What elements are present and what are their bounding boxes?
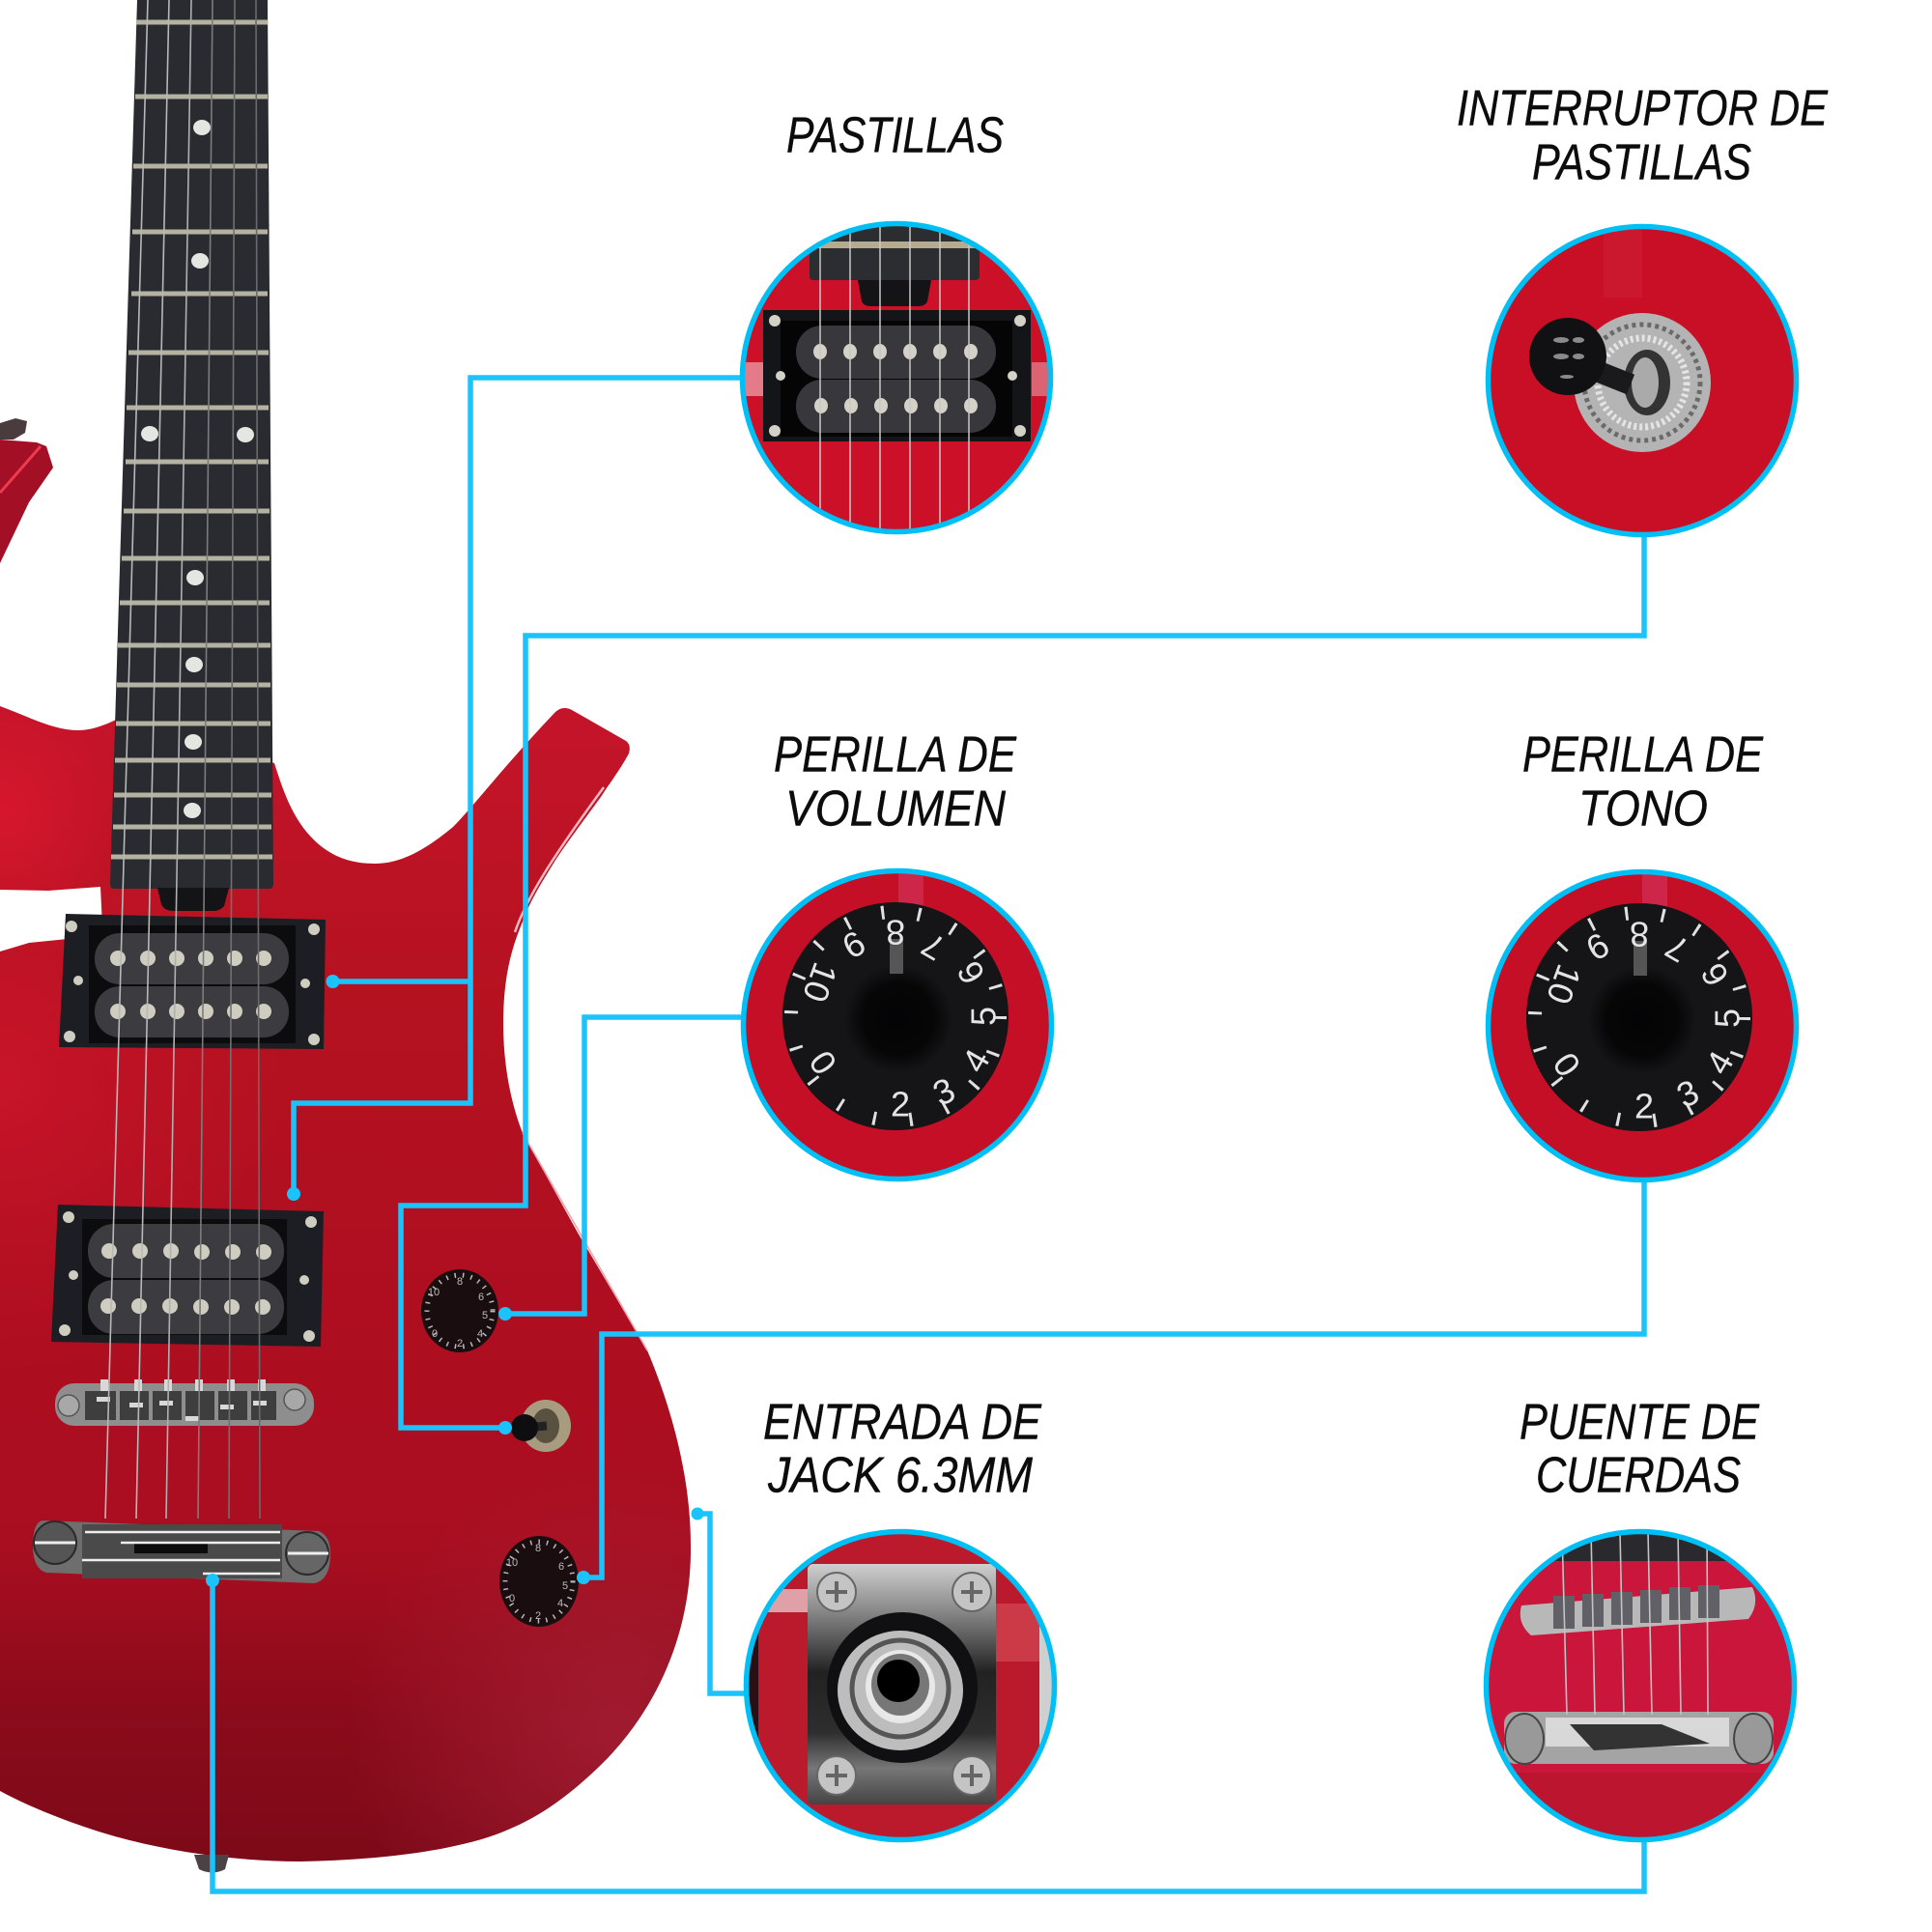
dial: 7	[1659, 926, 1695, 971]
dial: 4	[1697, 1044, 1742, 1081]
dial: 7	[915, 924, 952, 969]
tone knob: 0	[509, 1593, 515, 1605]
heading: interruptor de pastillas	[1457, 81, 1829, 191]
tone knob	[499, 1536, 579, 1627]
heading: entrada de jack 6.3mm: JACK 6.3MM	[767, 1447, 1034, 1503]
heading: entrada de jack 6.3mm: ENTRADA DE	[763, 1395, 1042, 1451]
toggle switch	[511, 1400, 571, 1452]
volume knob: 10	[428, 1287, 440, 1298]
dial: 0	[801, 1043, 845, 1082]
fret inlays	[141, 120, 254, 818]
dial: 5	[1708, 1009, 1747, 1028]
stop tailpiece	[33, 1520, 330, 1583]
callout circle: pastillas	[734, 217, 1063, 546]
tone knob: 10	[506, 1557, 518, 1569]
frets	[111, 22, 272, 857]
heading: perilla de volumen: VOLUMEN	[785, 781, 1006, 837]
guitar	[0, 0, 724, 1874]
dial: 8	[1630, 914, 1649, 954]
volume knob: 6	[478, 1292, 484, 1303]
dial: 9	[1579, 924, 1616, 969]
dial: 5	[964, 1007, 1003, 1026]
strap pin	[194, 1855, 229, 1872]
tone knob: 2	[535, 1610, 541, 1622]
heading: interruptor de pastillas: INTERRUPTOR DE	[1457, 81, 1829, 137]
neck heel	[157, 888, 229, 911]
volume knob: 8	[457, 1276, 463, 1288]
strings	[105, 0, 260, 1519]
connector: pastillas	[287, 378, 741, 1201]
heading: interruptor de pastillas: PASTILLAS	[1532, 135, 1751, 191]
dial: 6	[1692, 956, 1737, 993]
tone knob: 6	[558, 1561, 564, 1573]
dial: 3	[1670, 1071, 1705, 1116]
heading: perilla de tono: PERILLA DE	[1522, 726, 1764, 782]
callout circle: entrada de jack	[739, 1526, 1068, 1855]
heading: puente de cuerdas: CUERDAS	[1536, 1447, 1741, 1503]
heading: perilla de tono: TONO	[1578, 781, 1708, 837]
heading: perilla de volumen	[774, 726, 1017, 837]
dial: 2	[891, 1084, 910, 1124]
callout circle: interruptor de pastillas	[1478, 217, 1806, 546]
neck pickup	[59, 914, 326, 1049]
body highlights	[0, 705, 724, 1874]
tune-o-matic bridge	[55, 1379, 314, 1426]
volume knob: 4	[477, 1328, 483, 1340]
dial: 0	[1545, 1045, 1589, 1084]
connector: interruptor de pastillas	[401, 537, 1644, 1435]
dial: 4	[953, 1042, 998, 1079]
upper horn fragment	[0, 418, 53, 563]
connector: puente de cuerdas	[206, 1574, 1644, 1891]
dial: 2	[1634, 1086, 1654, 1126]
tone knob: 5	[562, 1580, 568, 1592]
heading: perilla de volumen: PERILLA DE	[774, 726, 1017, 782]
volume knob: 0	[432, 1328, 438, 1340]
volume knob: 2	[457, 1338, 463, 1350]
fretboard	[110, 0, 273, 889]
guitar body	[0, 706, 691, 1861]
callout circle: perilla de tono	[1478, 865, 1806, 1193]
dial: 8	[886, 912, 905, 952]
heading: puente de cuerdas: PUENTE DE	[1520, 1395, 1760, 1451]
dial: 3	[926, 1069, 961, 1114]
dial: 6	[949, 954, 993, 991]
heading: perilla de tono	[1522, 726, 1764, 837]
heading: entrada de jack 6.3mm	[763, 1395, 1042, 1503]
callout circle: perilla de volumen	[734, 865, 1063, 1193]
connector: perilla de tono	[577, 1182, 1644, 1584]
bridge pickup	[51, 1205, 324, 1347]
callout circle: puente de cuerdas	[1478, 1526, 1806, 1860]
dial: 9	[836, 923, 872, 967]
dial	[782, 902, 1009, 1130]
connector: entrada de jack	[692, 1507, 745, 1693]
dial: 10	[1539, 959, 1589, 1009]
volume knob: 5	[482, 1310, 488, 1321]
connector: perilla de volumen	[498, 1017, 741, 1321]
heading: pastillas: PASTILLAS	[786, 108, 1004, 164]
tone knob: 8	[535, 1543, 541, 1554]
tone knob: 4	[557, 1598, 563, 1609]
heading: puente de cuerdas	[1520, 1395, 1760, 1503]
dial: 10	[795, 957, 845, 1008]
volume knob	[421, 1269, 498, 1352]
dial	[1526, 903, 1752, 1131]
